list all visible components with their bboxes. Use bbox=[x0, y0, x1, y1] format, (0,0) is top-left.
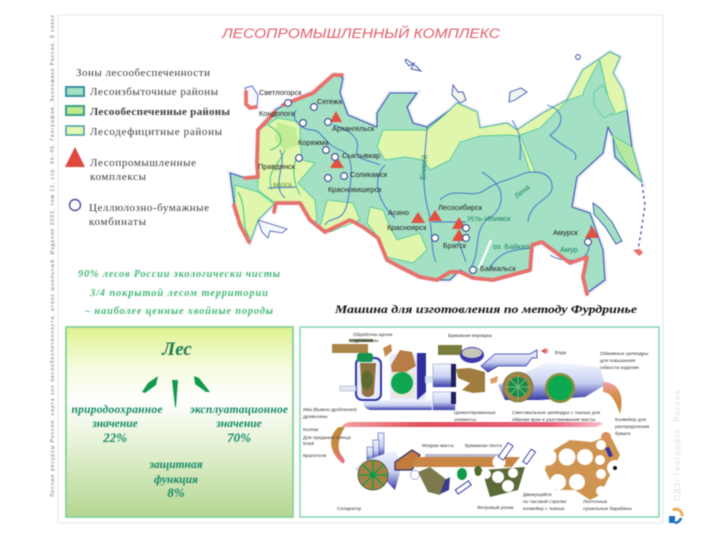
machine labels: Обработка щепок bbox=[353, 332, 393, 338]
forest complex markers bbox=[330, 111, 599, 241]
map labels: Архангельск bbox=[332, 124, 375, 133]
map labels: Красноярск bbox=[387, 223, 427, 232]
machine labels: Вода bbox=[555, 350, 567, 356]
machine labels: распределения bbox=[615, 425, 650, 430]
machine labels: по часовой стрелке bbox=[523, 498, 567, 505]
branch: conservation: 22% bbox=[102, 430, 127, 445]
machine labels: Ива (Вымон дробления) bbox=[303, 407, 357, 413]
map of Russia bbox=[230, 52, 645, 294]
map labels: Кондопога bbox=[259, 109, 296, 118]
branch: exploitation: значение bbox=[215, 418, 262, 430]
pulp mill markers bbox=[285, 100, 591, 273]
map labels: Сегежа bbox=[317, 97, 343, 106]
interior teal of Chukotka bbox=[594, 85, 615, 118]
red border segments bbox=[234, 75, 587, 294]
map labels: Сыктывкар bbox=[342, 151, 380, 160]
green facts text: – наиболее ценные хвойные породы bbox=[84, 306, 273, 317]
machine labels: Цементированные bbox=[454, 410, 496, 416]
map labels: Усть-Илимск bbox=[467, 214, 511, 223]
map labels: Асино bbox=[388, 208, 409, 217]
map labels: Светлогорск bbox=[259, 88, 302, 97]
machine labels bbox=[303, 332, 650, 512]
lower row equipment bbox=[355, 432, 623, 500]
panel: paper machine bbox=[300, 327, 659, 517]
green facts text bbox=[78, 269, 280, 317]
slide frame bbox=[58, 15, 663, 523]
machine labels: Колпак bbox=[303, 427, 319, 433]
curved flow left bbox=[331, 427, 345, 463]
Kola peninsula bbox=[245, 86, 258, 108]
mid-green forest pockets bbox=[275, 122, 298, 150]
machine labels: Красители bbox=[303, 453, 327, 459]
machine labels: Мокрая масса bbox=[422, 443, 454, 449]
branch: conservation: значение bbox=[91, 418, 138, 430]
forest surplus base bbox=[230, 52, 642, 293]
green facts text: 90% лесов России экологически чисты bbox=[78, 269, 280, 280]
icon: corner logo bbox=[669, 507, 684, 523]
branch: protection: функция bbox=[154, 474, 198, 486]
map labels: Красновишерск bbox=[328, 185, 382, 194]
machine labels: гибкости изделия bbox=[600, 365, 639, 371]
forest deficit regions bbox=[235, 52, 642, 263]
map labels: Братск bbox=[443, 241, 467, 250]
rivers bbox=[268, 105, 591, 270]
legend heading: Зоны лесообеспеченности bbox=[76, 67, 210, 79]
panel: forest bbox=[66, 327, 293, 517]
Caspian shore bbox=[258, 220, 287, 238]
legend item: surplus: Лесоизбыточные районы bbox=[90, 86, 219, 98]
machine labels: обвязки края и разглаживания массы bbox=[512, 417, 596, 423]
map labels: Байкальск bbox=[480, 264, 516, 273]
machine heading: Машина для изготовления по методу Фурдринье bbox=[334, 304, 637, 316]
branch: conservation bbox=[72, 404, 162, 445]
map labels: Лена bbox=[513, 182, 532, 201]
red pulp band bbox=[342, 422, 603, 427]
legend item: pulp mills: комбинаты bbox=[89, 216, 147, 228]
upper row equipment bbox=[332, 339, 605, 410]
legend item: sufficient: Лесообеспеченные районы bbox=[90, 106, 230, 118]
machine labels: Клей bbox=[303, 440, 314, 447]
branch: exploitation bbox=[189, 404, 288, 445]
machine labels: для повышения bbox=[600, 359, 636, 364]
machine labels: сушильные барабаны bbox=[583, 506, 632, 512]
machine labels: Фетровый ролик bbox=[477, 504, 514, 511]
machine labels: Для придания глянца bbox=[303, 435, 351, 441]
map labels bbox=[258, 88, 579, 273]
map labels: Соликамск bbox=[350, 170, 388, 179]
branch: protection bbox=[148, 459, 203, 500]
legend item: pulp mills: Целлюлозно-бумажные bbox=[89, 202, 209, 214]
machine labels: конвейер с тканью bbox=[523, 505, 565, 512]
right margin vertical caption: 5 ОДЗі Географія. Россия bbox=[673, 390, 682, 510]
legend item: forest complexes: комплексы bbox=[90, 171, 147, 183]
arrows bbox=[142, 376, 210, 407]
legend item: forest complexes: Лесопромышленные bbox=[90, 157, 196, 169]
machine labels: Бумажная лента bbox=[465, 443, 502, 449]
map labels: волга bbox=[273, 180, 293, 189]
map labels: Енисей bbox=[418, 154, 429, 180]
machine labels: Сепаратор bbox=[337, 506, 361, 512]
map labels: оз. Байкал bbox=[493, 242, 529, 251]
map labels: Лесосибирск bbox=[438, 203, 483, 212]
machine labels: Бумажная впрокрка bbox=[448, 333, 492, 339]
branch: exploitation: 70% bbox=[227, 430, 251, 445]
branch: protection: 8% bbox=[167, 485, 185, 500]
curved flow right bbox=[603, 382, 622, 414]
map labels: Амурск bbox=[553, 228, 579, 237]
machine labels: Ленточные bbox=[583, 499, 608, 505]
legend bbox=[65, 67, 230, 228]
machine labels: Конвейер для bbox=[615, 416, 646, 423]
green facts text: 3/4 покрытой лесом территории bbox=[89, 288, 268, 299]
machine labels: Смесовальные цилиндры с тканью для bbox=[512, 410, 600, 416]
bright green streams bbox=[238, 125, 300, 238]
Kuril islands bbox=[638, 184, 645, 250]
lake Baikal bbox=[479, 240, 491, 268]
map labels: Правдинск bbox=[258, 162, 296, 171]
machine labels: древесины bbox=[303, 415, 328, 420]
Kuril red marker bbox=[633, 249, 643, 256]
branch: protection: защитная bbox=[148, 459, 203, 471]
title: ЛЕСОПРОМЫШЛЕННЫЙ КОМПЛЕКС bbox=[221, 25, 500, 41]
left margin vertical caption: Лесные ресурсы России: карта зон лесообеспеченности, атлас школьный. Издание 2003, том 12, стр. 44–45, География, Экономика России, 9 класс bbox=[49, 14, 56, 497]
machine labels: Обжимные цилиндры bbox=[600, 351, 649, 357]
legend item: forest complexes bbox=[65, 147, 196, 183]
machine labels: бумаги bbox=[615, 431, 631, 437]
branch: conservation: природоохранное bbox=[72, 404, 162, 416]
map labels: Амур bbox=[560, 245, 578, 254]
islands bbox=[405, 54, 622, 244]
coast halo bbox=[230, 52, 642, 293]
map labels: Коряжма bbox=[298, 138, 329, 147]
machine labels: элементы bbox=[454, 418, 477, 423]
branch: exploitation: эксплуатационное bbox=[189, 404, 288, 416]
machine labels: Движущийся bbox=[523, 491, 552, 498]
legend item: deficit: Лесодефицитные районы bbox=[90, 126, 223, 138]
machine labels: древесины bbox=[354, 339, 379, 344]
legend item: pulp mills bbox=[70, 200, 209, 228]
heading: forest: Лес bbox=[161, 339, 192, 360]
